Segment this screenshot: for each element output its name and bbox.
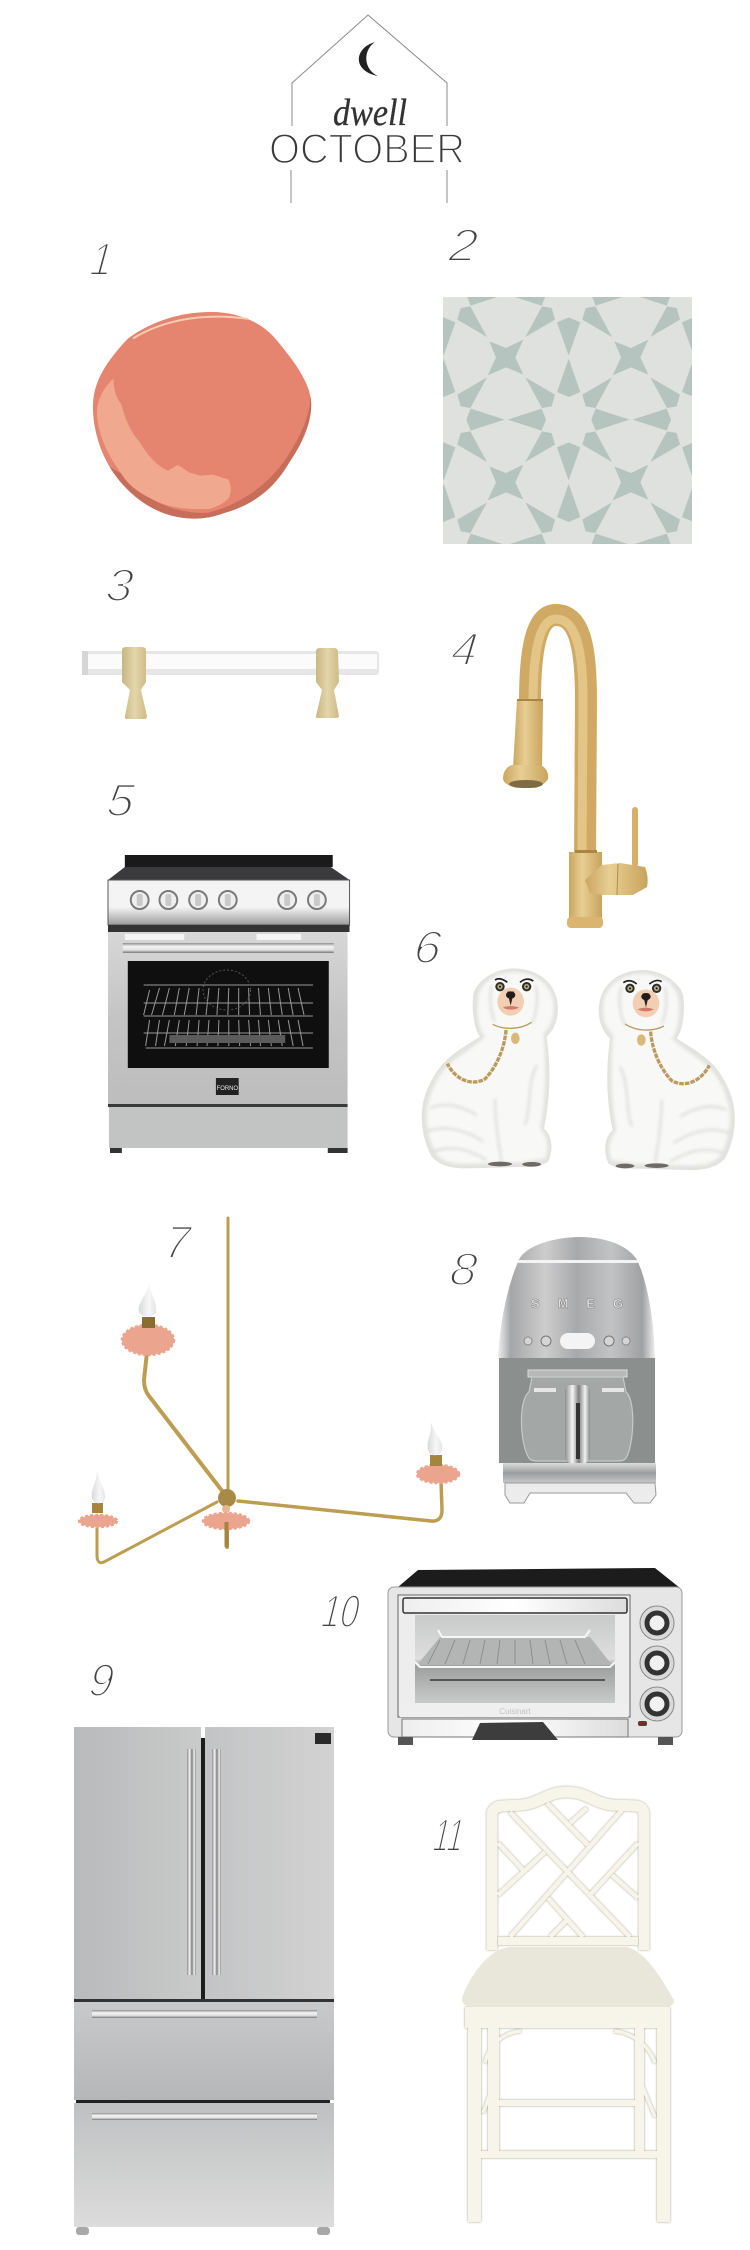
brass chandelier bbox=[79, 1218, 459, 1563]
number 3: 3 bbox=[103, 560, 136, 612]
candle arm one bbox=[122, 1283, 174, 1355]
Smeg coffee maker bbox=[498, 1237, 656, 1503]
acrylic brass cabinet pull bbox=[82, 647, 379, 719]
cement tile bbox=[443, 297, 692, 544]
candle arm three bbox=[79, 1470, 117, 1527]
icon: crescent moon bbox=[359, 42, 378, 76]
glass carafe bbox=[521, 1370, 633, 1463]
paint swatch bbox=[93, 312, 311, 519]
script word dwell: dwell bbox=[333, 92, 407, 134]
stool apron bbox=[465, 2007, 670, 2028]
stool seat cushion bbox=[462, 1947, 674, 2007]
number 11: 11 bbox=[431, 1810, 466, 1862]
drawer handles bbox=[92, 2010, 317, 2120]
toaster knobs bbox=[640, 1606, 674, 1721]
number 6: 6 bbox=[411, 922, 444, 974]
bamboo counter stool bbox=[462, 1792, 674, 2222]
SMEG lettering: SMEG bbox=[531, 1296, 623, 1311]
pair of porcelain dogs bbox=[422, 968, 735, 1170]
range knobs bbox=[131, 891, 326, 909]
number 2: 2 bbox=[446, 220, 480, 271]
toaster oven bbox=[388, 1568, 682, 1745]
number 9: 9 bbox=[87, 1654, 117, 1706]
number 4: 4 bbox=[449, 623, 480, 675]
house outline bbox=[291, 15, 447, 203]
oven door handle bbox=[123, 943, 334, 953]
door handles bbox=[187, 1749, 221, 1975]
oven window bbox=[128, 961, 329, 1068]
coffee maker controls bbox=[524, 1333, 630, 1349]
number 10: 10 bbox=[319, 1586, 362, 1637]
range logo: FORNO bbox=[217, 1086, 238, 1092]
center disc bbox=[203, 1513, 249, 1529]
candle arm two bbox=[417, 1422, 459, 1483]
Cuisinart label: Cuisinart bbox=[499, 1707, 532, 1716]
number 8: 8 bbox=[447, 1244, 480, 1296]
stainless range bbox=[108, 855, 350, 1153]
range logo bbox=[216, 1078, 239, 1095]
chandelier arms and stem bbox=[97, 1218, 442, 1563]
logo: dwell October house bbox=[269, 15, 465, 203]
stool back, legs and lattice bbox=[465, 1792, 670, 2222]
stainless French-door refrigerator bbox=[74, 1727, 334, 2235]
fridge logo bbox=[315, 1733, 331, 1744]
number 1: 1 bbox=[88, 234, 115, 286]
oven window bbox=[415, 1615, 615, 1703]
number 7: 7 bbox=[163, 1216, 194, 1268]
gold kitchen faucet bbox=[503, 615, 648, 928]
heading October: OCTOBER bbox=[269, 125, 465, 172]
number 5: 5 bbox=[104, 775, 137, 827]
